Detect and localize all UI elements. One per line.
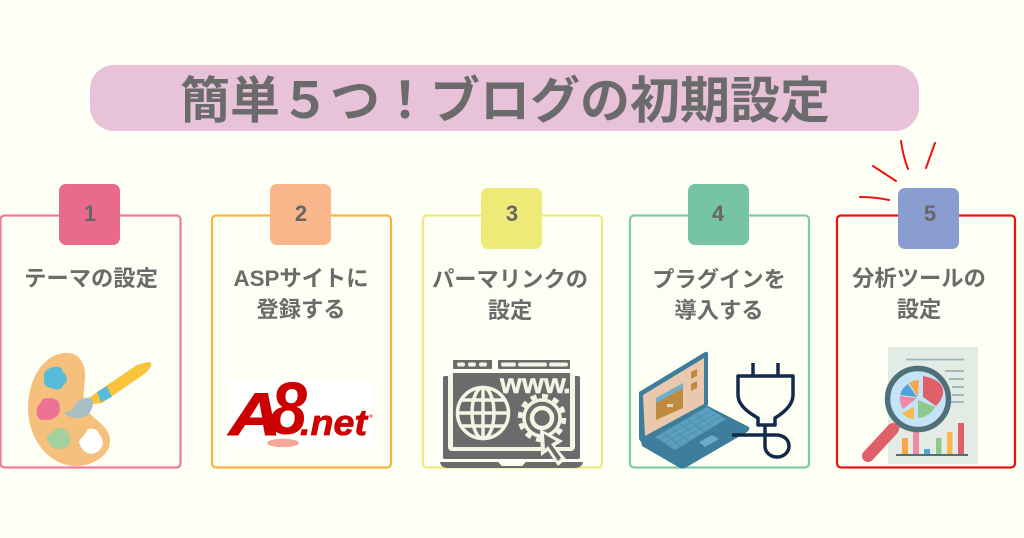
label: theme setting: テーマの設定: [24, 266, 158, 291]
title: 簡単５つ！ブログの初期設定: [180, 61, 830, 133]
label: install plugins: プラグインを: [652, 266, 786, 292]
logo: A8.net: [227, 367, 373, 450]
logo: A8.net: A: [227, 381, 281, 448]
panel: step 1 theme: [0, 184, 180, 468]
badge 1: 1: [84, 201, 96, 226]
badge 3: [481, 188, 542, 249]
badge 2: 2: [295, 201, 307, 226]
panel: step 3 permalink: [423, 188, 602, 468]
badge 5: [898, 188, 959, 249]
badge 5: 5: [924, 201, 936, 226]
badge 3: 3: [506, 201, 518, 226]
label: install plugins: 導入する: [674, 298, 764, 323]
badge 1: [59, 184, 120, 245]
label: analytics tool setting: 分析ツールの: [852, 266, 986, 291]
logo: A8.net: .net: [300, 402, 369, 443]
icon: palette and brush: [28, 353, 151, 466]
label: permalink setting: 設定: [488, 298, 532, 323]
title banner: [90, 61, 919, 133]
icon: power plug: [732, 363, 793, 457]
badge 4: [688, 184, 749, 245]
panel: step 5 analytics: [837, 141, 1015, 468]
icon: laptop with www, globe and gear: www.: [499, 368, 571, 399]
panel: step 4 plugin: [630, 184, 809, 468]
label: permalink setting: パーマリンクの: [432, 267, 588, 292]
panel: step 2 ASP: [212, 184, 391, 468]
label: permalink setting: [432, 267, 588, 323]
icon: laptop with www, globe and gear: [440, 360, 583, 468]
label: analytics tool setting: [852, 266, 986, 322]
label: install plugins: [652, 266, 786, 323]
accent rays: [860, 141, 935, 200]
badge 4: 4: [712, 201, 725, 226]
label: register with ASP site: [233, 266, 369, 322]
icon: report with magnifier: [868, 347, 978, 464]
badge 2: [270, 184, 331, 245]
label: register with ASP site: 登録する: [256, 297, 346, 322]
label: register with ASP site: ASPサイトに: [233, 266, 369, 291]
label: analytics tool setting: 設定: [897, 297, 941, 322]
icon: laptop: [639, 352, 749, 468]
logo: A8.net: 8: [270, 367, 308, 450]
